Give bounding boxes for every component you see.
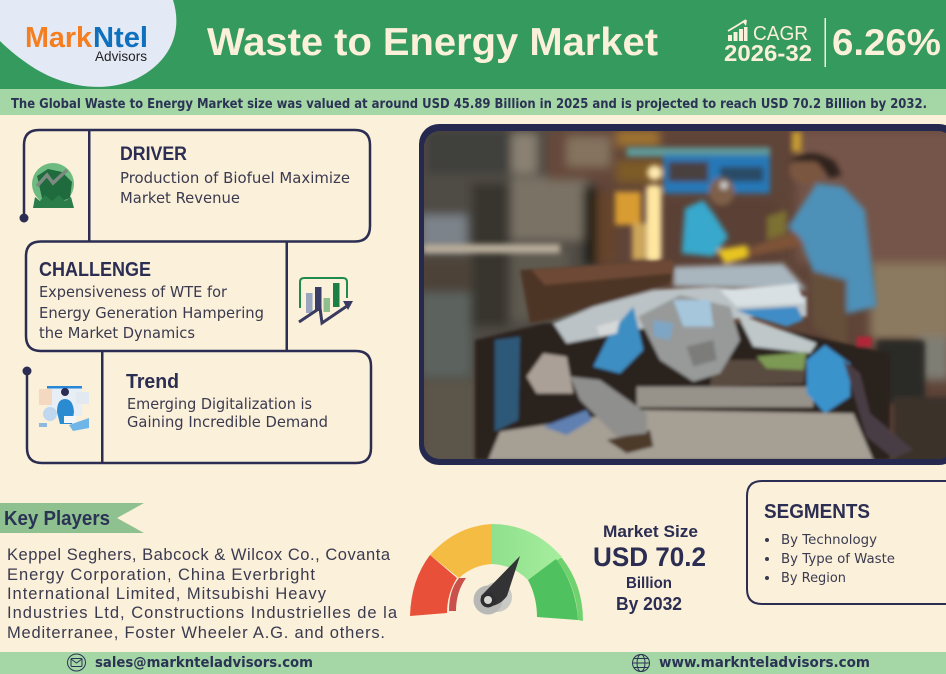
challenge text: Energy Generation Hampering: [39, 304, 264, 322]
gauge yellow segment: [430, 524, 492, 578]
CAGR period: 2026-32: [724, 40, 812, 66]
challenge heading: CHALLENGE: [39, 259, 151, 281]
segments list: By Region: [781, 570, 846, 586]
gauge chart: [410, 524, 583, 621]
panel: segments: [747, 481, 946, 604]
key players list: Mediterranee, Foster Wheeler A.G. and others.: [7, 624, 385, 642]
CAGR label: CAGR: [753, 23, 808, 45]
segments heading: SEGMENTS: [764, 501, 870, 523]
market size callout: [593, 522, 706, 614]
segments list: [765, 532, 895, 586]
footer band: [0, 652, 946, 674]
email address: sales@marknteladvisors.com: [95, 655, 313, 671]
driver heading: DRIVER: [120, 144, 187, 165]
trend heading: Trend: [126, 371, 179, 393]
gauge side faces: [449, 578, 466, 611]
gauge needle and hub: [474, 556, 520, 614]
challenge text: [39, 283, 264, 342]
market size callout: Billion: [626, 575, 672, 592]
panel: driver, challenge, trend: [20, 130, 371, 463]
key players list: [7, 546, 398, 642]
icon: globe: [632, 654, 650, 672]
icon: bar chart with arrow: [299, 278, 353, 323]
icon: envelope: [68, 654, 86, 671]
icon: person at digital screens: [39, 386, 89, 431]
key players banner: Key Players: [4, 508, 110, 530]
key players list: Industries Ltd, Constructions Industrielles de la: [7, 604, 398, 622]
market size callout: By 2032: [616, 594, 682, 614]
title: Waste to Energy Market: [207, 21, 658, 64]
header band: [0, 0, 946, 89]
market size callout: USD 70.2: [593, 542, 706, 572]
icon: growth bars: [728, 20, 748, 41]
key players banner: [0, 503, 144, 533]
logo: MarkNtel Advisors: Advisors: [95, 48, 147, 64]
CAGR block: [724, 18, 941, 67]
icon: green globe with growth arrow: [32, 163, 74, 208]
market size callout: Market Size: [603, 522, 698, 541]
trend text: Emerging Digitalization is: [127, 395, 312, 413]
trend text: [127, 395, 328, 431]
driver text: Market Revenue: [120, 189, 240, 207]
segments list: By Technology: [781, 532, 877, 548]
driver text: Production of Biofuel Maximize: [120, 169, 350, 187]
key players list: International Limited, Mitsubishi Heavy: [7, 585, 327, 603]
gauge red segment: [410, 555, 457, 616]
logo: MarkNtel Advisors: Ntel: [93, 22, 148, 54]
challenge text: the Market Dynamics: [39, 324, 195, 342]
photo: workers sorting plastic waste: [419, 120, 946, 470]
driver text: [120, 169, 350, 207]
segments list: By Type of Waste: [781, 551, 895, 567]
challenge text: Expensiveness of WTE for: [39, 283, 228, 301]
gauge dark green segment: [528, 559, 578, 620]
logo: MarkNtel Advisors: Mark: [25, 22, 93, 54]
summary band: [0, 89, 946, 115]
CAGR value: 6.26%: [832, 22, 941, 63]
trend text: Gaining Incredible Demand: [127, 413, 328, 431]
logo: MarkNtel Advisors: [0, 0, 176, 87]
key players list: Keppel Seghers, Babcock & Wilcox Co., Covanta: [7, 546, 391, 564]
website address: www.marknteladvisors.com: [659, 655, 870, 671]
gauge light green segment: [492, 524, 562, 580]
key players list: Energy Corporation, China Everbright: [7, 566, 315, 584]
